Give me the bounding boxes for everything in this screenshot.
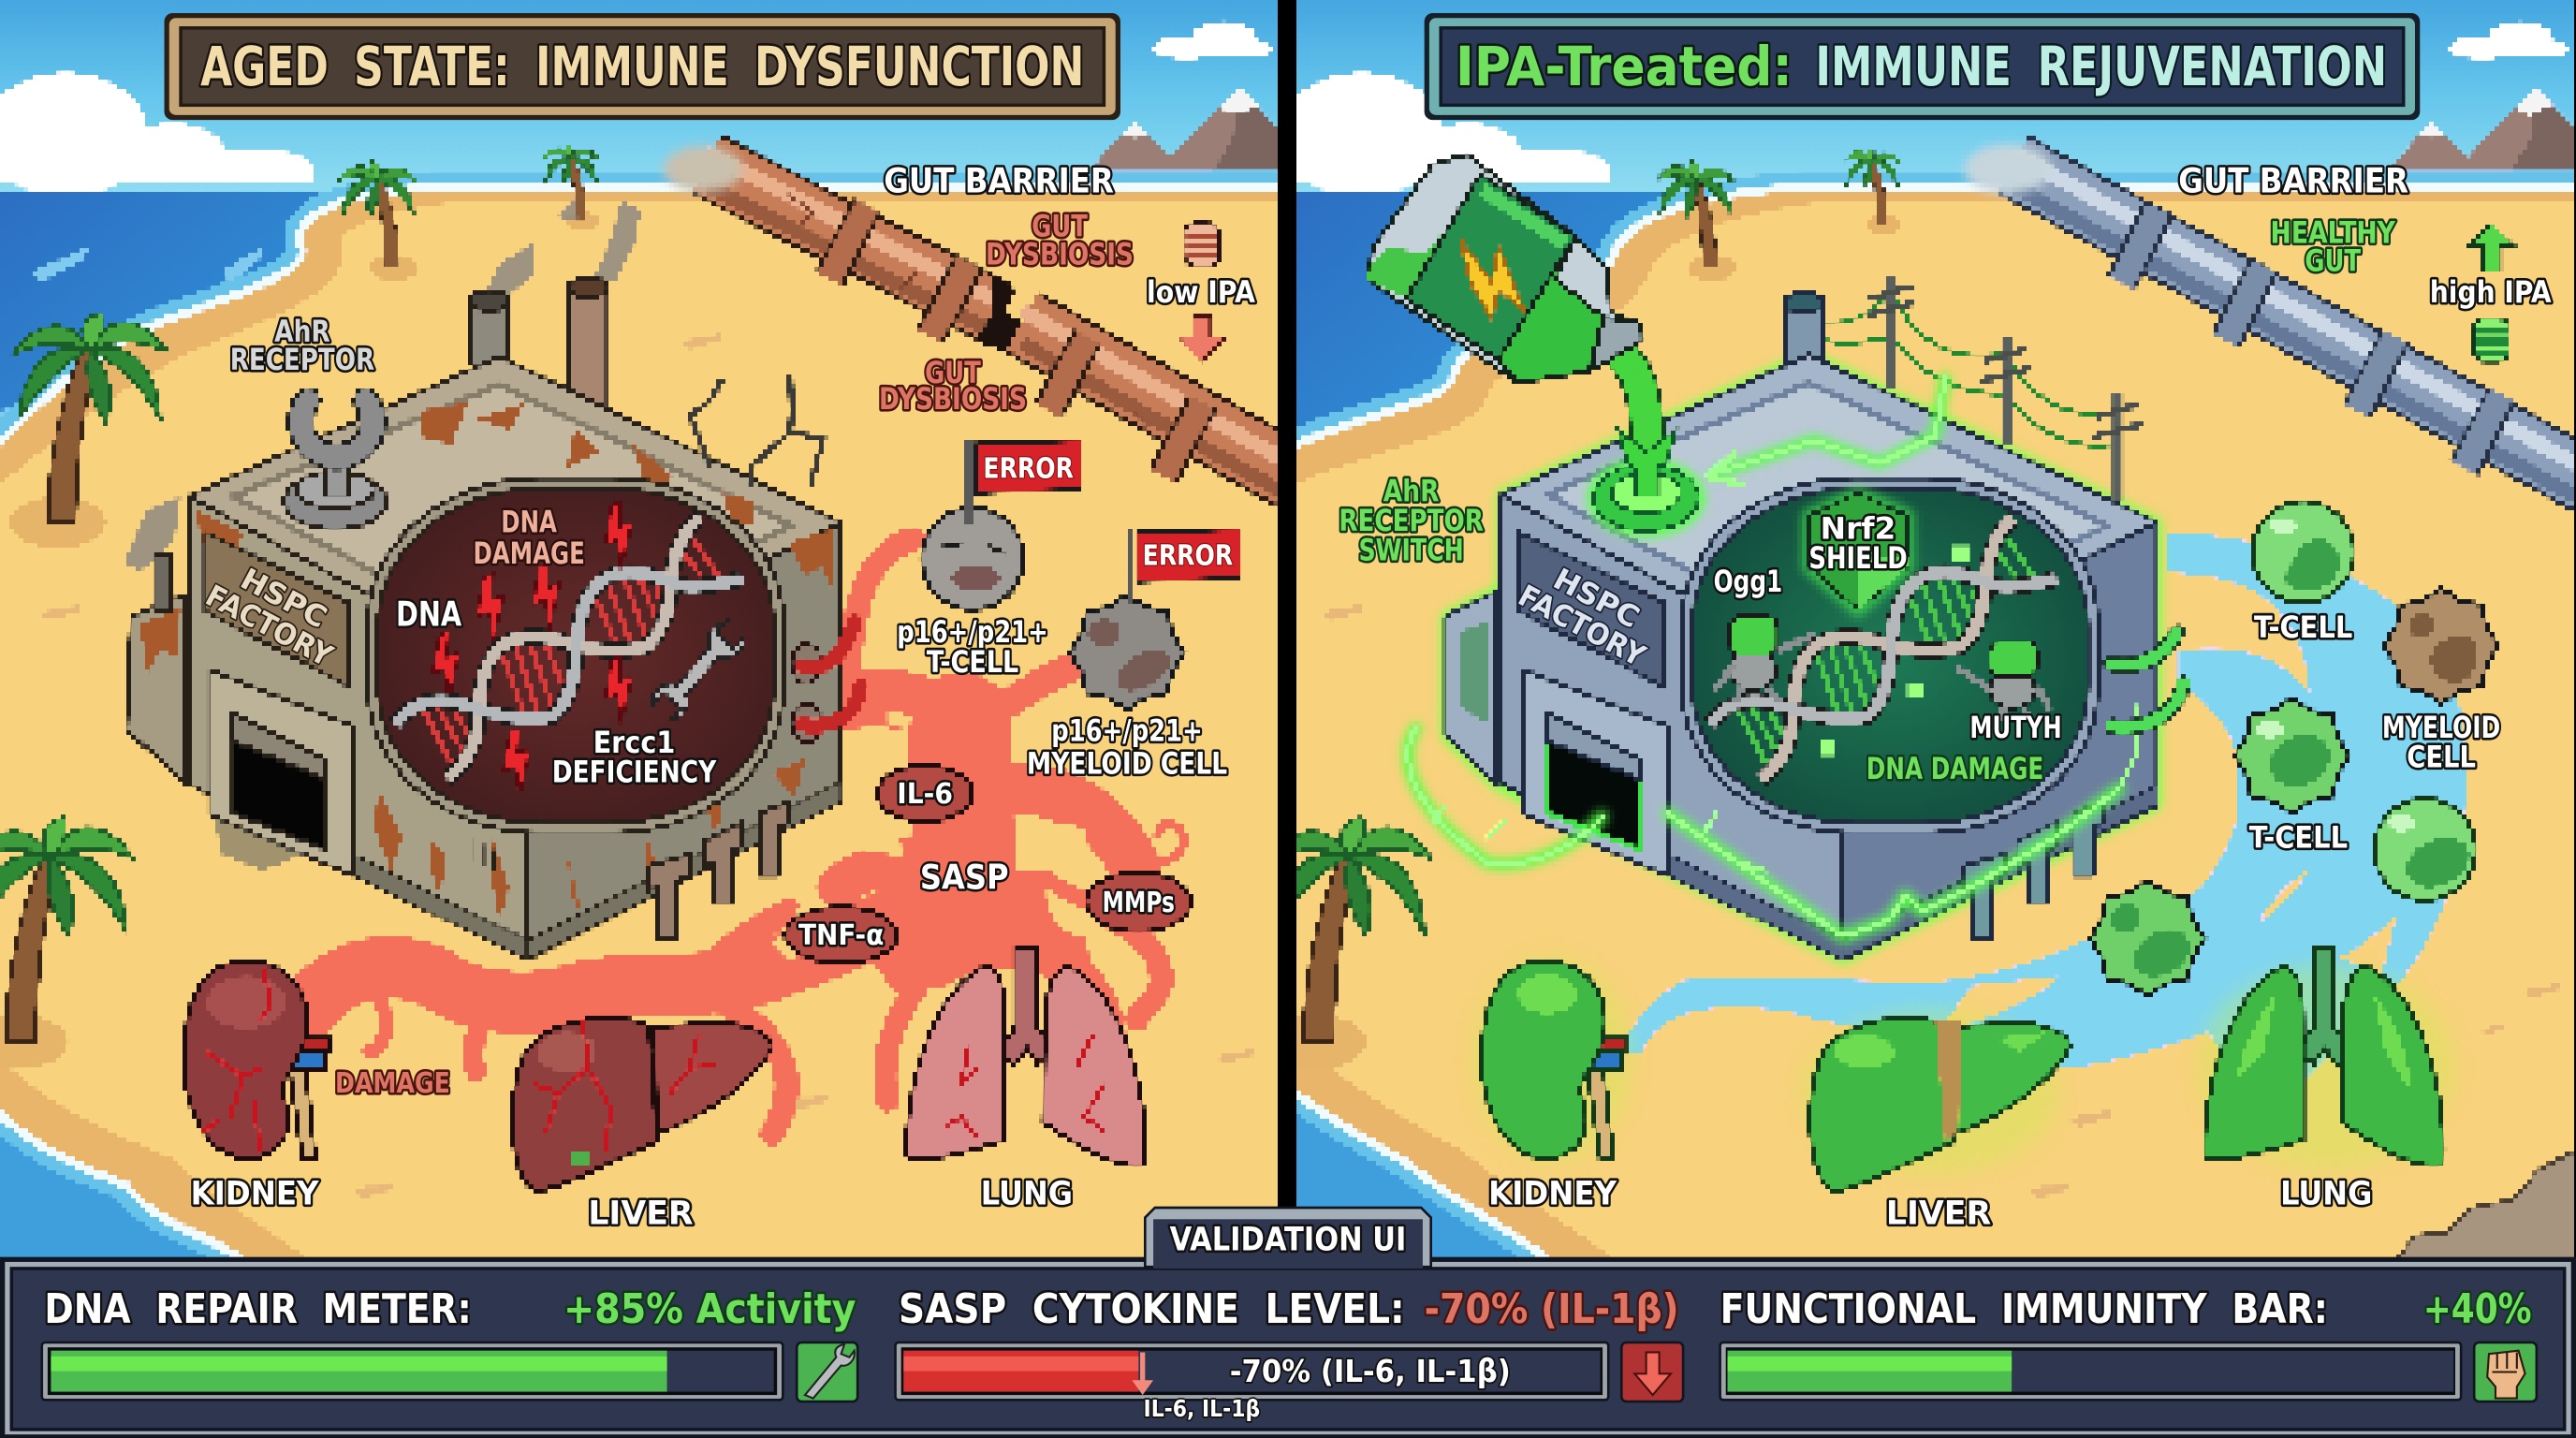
cytokine labels: TNF-α (798, 919, 884, 952)
palm trees (0, 144, 601, 1069)
left wall (189, 496, 527, 960)
annex (126, 594, 185, 784)
HUD frame (0, 1257, 2576, 1438)
cytokine pills (785, 766, 1191, 962)
SASP cytokine level: SASP CYTOKINE LEVEL: (899, 1285, 1405, 1333)
Ercc1 deficiency: Ercc1 (593, 726, 675, 760)
panel: IPA treated (1263, 0, 2576, 1262)
Nrf2 shield label (1808, 513, 1908, 576)
SASP cytokine level: -70% (IL-1β) (1425, 1285, 1679, 1333)
icon: fist (2474, 1343, 2537, 1401)
healthy gut: GUT (2305, 245, 2361, 279)
tank (368, 478, 783, 833)
DNA helix damaged (396, 518, 742, 779)
gut dysbiosis upper (986, 211, 1134, 272)
DNA repair meter: +85% Activity (564, 1285, 856, 1333)
organ labels (1488, 1174, 2372, 1233)
cytokine labels: IL-6 (897, 778, 953, 811)
AhR receptor fork (285, 401, 386, 529)
senescent myeloid cell (1070, 594, 1184, 710)
factory sign: HSPC (235, 563, 332, 636)
low IPA arrow (1178, 315, 1225, 361)
left wall (1501, 494, 1843, 960)
kidney damaged (183, 961, 330, 1159)
bottle lightning (1460, 240, 1525, 318)
outlet pipes (649, 801, 788, 940)
high IPA arrow (2467, 224, 2515, 271)
factory sign: FACTORY (1513, 580, 1651, 674)
Nrf2 shield label: Nrf2 (1821, 513, 1895, 547)
cell labels: T-CELL (2249, 822, 2348, 856)
red ports and vines (792, 621, 861, 742)
cell labels: T-CELL (2254, 611, 2352, 645)
DNA repair meter: DNA REPAIR METER: (44, 1285, 472, 1333)
myeloid label: p16+/p21+ (1051, 715, 1203, 749)
validation tab (1145, 1208, 1431, 1269)
labels: aged state (165, 13, 1255, 1233)
cell labels: MYELOID (2382, 712, 2500, 745)
cytokine labels: MMPs (1103, 887, 1175, 919)
broken wires (690, 374, 823, 488)
title banner: AGED STATE: IMMUNE DYSFUNCTION (200, 35, 1084, 98)
right wall (527, 522, 842, 960)
cell labels: CELL (2407, 741, 2476, 775)
AhR receptor switch label: AhR (1383, 475, 1439, 508)
liver damaged (512, 1018, 772, 1191)
damage bolts (420, 501, 646, 799)
healthy gut (2271, 217, 2396, 279)
MUTYH label: MUTYH (1969, 712, 2062, 745)
sand patches (41, 332, 1255, 1199)
cytokine bar (896, 1343, 1608, 1400)
sign (205, 533, 350, 687)
Nrf2 shield label: SHIELD (1808, 542, 1908, 576)
HSPC factory: rusted (126, 278, 842, 960)
title banner: IPA-Treated: (1456, 35, 1793, 98)
wall base strips (353, 782, 842, 960)
chimney (1784, 292, 1823, 365)
vents (463, 835, 493, 869)
title banner: IMMUNE REJUVENATION (1815, 35, 2387, 98)
waves (0, 246, 263, 424)
low IPA barrel (1184, 224, 1219, 266)
mountains (1090, 89, 1278, 172)
myeloid cell green (2089, 881, 2204, 996)
organ glow (1473, 958, 2454, 1175)
Ogg1 label: Ogg1 (1714, 565, 1782, 599)
AhR receptor label: RECEPTOR (230, 344, 374, 377)
sand beach (1296, 194, 2576, 1262)
Ercc1 deficiency: DEFICIENCY (552, 756, 717, 789)
IPA stream (1618, 353, 1647, 501)
HSPC factory: restored (1445, 292, 2157, 960)
SASP cytokine level (896, 1285, 1683, 1422)
functional immunity bar: +40% (2423, 1285, 2532, 1333)
DNA damage label: DAMAGE (473, 537, 585, 571)
sand patches (1323, 398, 2561, 1199)
rocks (2395, 1151, 2576, 1262)
cell labels (2249, 611, 2500, 856)
annex (1445, 592, 1497, 785)
repair sparks (1821, 546, 1969, 756)
gut dysbiosis upper: DYSBIOSIS (986, 239, 1134, 272)
sign (1519, 533, 1664, 687)
gut dysbiosis upper: GUT (1032, 211, 1088, 244)
panel: aged state (0, 0, 1298, 1262)
stream wisps (1939, 869, 2397, 1032)
immunity bar (1720, 1343, 2461, 1400)
organ labels: LUNG (981, 1174, 1073, 1212)
Ercc1 deficiency (552, 726, 717, 789)
door (1525, 670, 1667, 875)
wall base strips (1667, 785, 2157, 960)
cytokine bar sublabel: IL-6, IL-1β (1144, 1395, 1260, 1422)
AhR receptor label (230, 315, 374, 377)
liver healthy (1810, 1018, 2070, 1191)
door (211, 670, 353, 875)
labels: IPA treated (1339, 13, 2552, 1233)
error flag labels: ERROR (983, 453, 1074, 486)
title banner (1425, 13, 2420, 120)
sea (1296, 192, 2576, 1262)
rust stains (139, 403, 835, 920)
T-cell lower (2374, 799, 2478, 901)
DNA damage label: DNA (501, 506, 557, 540)
chimneys (470, 278, 607, 411)
MUTYH robot (1956, 640, 2050, 720)
repair bar (42, 1343, 783, 1400)
sea (0, 192, 318, 1257)
gut dysbiosis lower: GUT (925, 357, 981, 390)
DNA label: DNA (396, 594, 462, 635)
icon: wrench (797, 1343, 857, 1401)
sky (0, 0, 1278, 194)
sand beach (0, 194, 1278, 1262)
gut dysbiosis lower (879, 357, 1027, 417)
T-cell upper (2252, 501, 2354, 603)
functional immunity bar (1720, 1285, 2537, 1401)
power poles and wires (1808, 274, 2143, 500)
cytokine bar: -70% (IL-6, IL-1β) (1230, 1353, 1511, 1389)
right wall (1843, 522, 2157, 960)
organ labels: KIDNEY (1488, 1174, 1617, 1212)
DNA damage label: DNA DAMAGE (1866, 753, 2043, 786)
organ labels (191, 1174, 1073, 1233)
validation tab: VALIDATION UI (1170, 1221, 1406, 1259)
clouds (1280, 22, 2569, 198)
myeloid label (1027, 715, 1227, 782)
high IPA barrel (2474, 318, 2509, 361)
organ labels: KIDNEY (191, 1174, 319, 1212)
damage label: DAMAGE (335, 1067, 450, 1100)
cytokine labels (798, 778, 1175, 952)
lung damaged (907, 948, 1146, 1166)
panel: validation HUD (0, 1208, 2576, 1438)
AhR receptor switch label (1339, 475, 1484, 567)
organ labels: LIVER (1886, 1195, 1991, 1233)
kidney healthy (1482, 961, 1628, 1159)
senescent T-cell (922, 507, 1023, 609)
DNA damage label (473, 506, 585, 571)
T-cell label: p16+/p21+ (897, 616, 1048, 650)
roof (1501, 355, 2157, 682)
AhR receptor switch (1587, 431, 1705, 537)
DNA repair meter (42, 1285, 857, 1401)
AhR receptor switch label: SWITCH (1358, 534, 1464, 567)
myeloid cell brown (2384, 588, 2499, 703)
high IPA label: high IPA (2430, 276, 2552, 310)
T-cell label: T-CELL (927, 646, 1018, 680)
functional immunity bar: FUNCTIONAL IMMUNITY BAR: (1720, 1285, 2328, 1333)
lung healthy (2204, 948, 2443, 1166)
error flag labels (983, 453, 1233, 573)
icon: down arrow (1621, 1343, 1683, 1401)
SASP flow (312, 539, 1183, 1134)
divider (1279, 0, 1296, 1273)
energy lines (1408, 378, 2136, 936)
healthy gut: HEALTHY (2271, 217, 2396, 251)
factory glow (1445, 355, 2157, 960)
blue stream (1618, 533, 2466, 1117)
gut dysbiosis lower: DYSBIOSIS (879, 383, 1027, 417)
gut barrier pipe: healthy (1965, 144, 2576, 507)
myeloid label: MYELOID CELL (1027, 748, 1227, 782)
sand cutouts in flow (772, 710, 1104, 961)
green ports (2111, 633, 2184, 727)
clouds (0, 22, 1273, 198)
error flag labels: ERROR (1143, 540, 1233, 573)
organ labels: LIVER (588, 1195, 694, 1233)
roof (189, 357, 842, 682)
tank (1682, 478, 2098, 833)
title banner (165, 13, 1120, 120)
error flags art (970, 440, 1240, 605)
sky (1296, 0, 2576, 194)
SASP label: SASP (920, 858, 1009, 898)
T-cell spiky (2234, 698, 2349, 814)
gut barrier pipe: damaged (664, 146, 1298, 501)
organ labels: LUNG (2280, 1174, 2372, 1212)
mountains (2365, 87, 2576, 194)
SASP mass above lungs (871, 871, 1097, 1003)
AhR receptor switch label: RECEPTOR (1339, 505, 1484, 538)
palm trees (1263, 148, 1902, 1069)
AhR receptor label: AhR (274, 315, 330, 349)
wrench (648, 618, 749, 725)
outlet pipes (1963, 801, 2103, 940)
factory sign: FACTORY (200, 580, 339, 674)
factory sign: HSPC (1547, 563, 1645, 636)
gut barrier label: GUT BARRIER (884, 160, 1114, 200)
DNA helix repaired (1710, 518, 2056, 779)
low IPA label: low IPA (1147, 276, 1255, 310)
T-cell label (897, 616, 1048, 680)
Nrf2 shield (1808, 493, 1908, 609)
IPA bottle (1367, 154, 1643, 383)
Ogg1 robot (1715, 616, 1814, 703)
gut barrier label: GUT BARRIER (2178, 160, 2408, 200)
smoke (124, 198, 640, 572)
